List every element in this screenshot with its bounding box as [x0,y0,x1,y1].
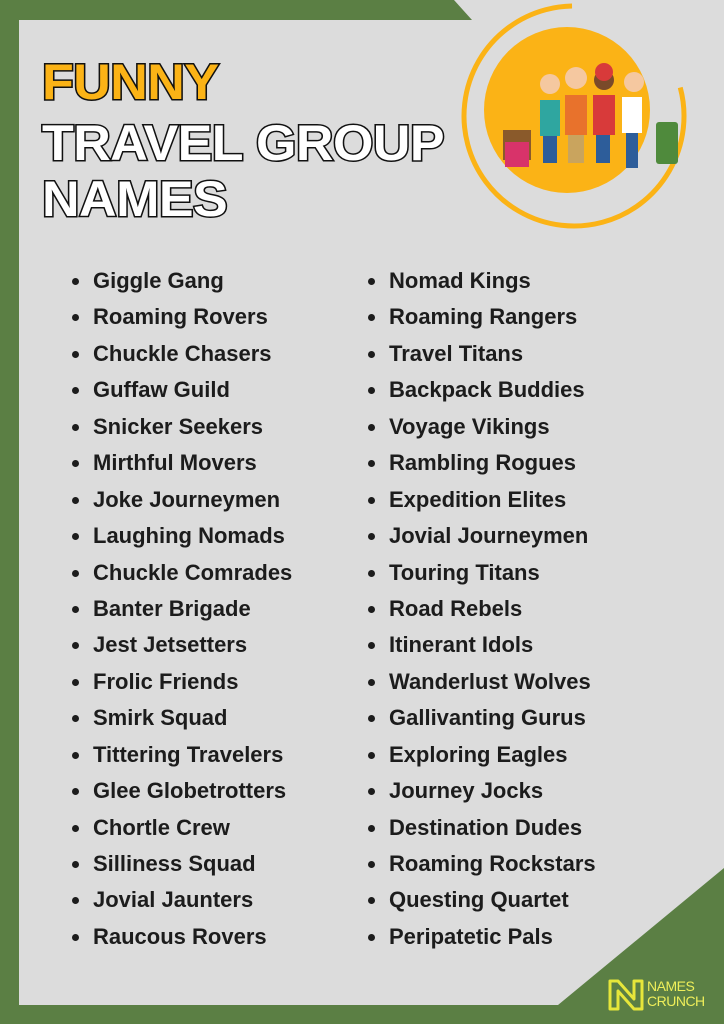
list: left column: Guffaw Guild [93,377,230,402]
list: right column: Roaming Rangers [389,304,577,329]
list: right column: Wanderlust Wolves [389,669,591,694]
list: right column: Backpack Buddies [389,377,585,402]
list: right column: Exploring Eagles [389,742,568,767]
list: left column: Chuckle Chasers [93,341,272,366]
list: right column: Expedition Elites [389,487,566,512]
list: left column: Giggle Gang [93,268,224,293]
list: left column: Chortle Crew [93,815,230,840]
title [41,54,444,227]
list: left column: Mirthful Movers [93,450,257,475]
list: left column: Laughing Nomads [93,523,285,548]
title line: FUNNY: FUNNY [42,54,219,110]
list: right column: Nomad Kings [389,268,531,293]
list: right column [368,268,596,949]
list: left column: Jest Jetsetters [93,632,247,657]
list: left column: Snicker Seekers [93,414,263,439]
title line: NAMES: NAMES [42,171,227,227]
list: left column: Frolic Friends [93,669,238,694]
list: right column: Roaming Rockstars [389,851,596,876]
list: right column: Touring Titans [389,560,540,584]
logo: Names Crunch [608,978,705,1010]
list: left column: Joke Journeymen [93,487,280,512]
list: left column: Banter Brigade [93,596,251,621]
list: left column: Smirk Squad [93,705,227,730]
list: left column: Chuckle Comrades [93,560,292,584]
icon: N logo [608,980,644,1010]
list: right column: Questing Quartet [389,887,569,912]
list: right column: Travel Titans [389,341,523,366]
logo text: NAMES [647,978,694,994]
list: right column: Rambling Rogues [389,450,576,475]
list: left column [72,268,292,949]
list: left column: Jovial Jaunters [93,887,253,912]
list: right column: Destination Dudes [389,815,582,840]
logo text [647,978,705,1009]
list: right column: Jovial Journeymen [389,523,588,548]
list: right column: Itinerant Idols [389,632,533,657]
list: right column: Peripatetic Pals [389,924,553,949]
list: left column: Roaming Rovers [93,304,268,329]
list: left column: Tittering Travelers [93,742,283,767]
list: right column: Gallivanting Gurus [389,705,586,730]
title line: TRAVEL GROUP: TRAVEL GROUP [42,115,444,171]
illustration: travelers in yellow circle [462,4,686,228]
logo text: CRUNCH [647,993,705,1009]
list: left column: Raucous Rovers [93,924,267,949]
list: right column: Journey Jocks [389,778,543,803]
list: left column: Silliness Squad [93,851,256,876]
list: right column: Road Rebels [389,596,522,621]
list: left column: Glee Globetrotters [93,778,286,803]
list: right column: Voyage Vikings [389,414,550,439]
